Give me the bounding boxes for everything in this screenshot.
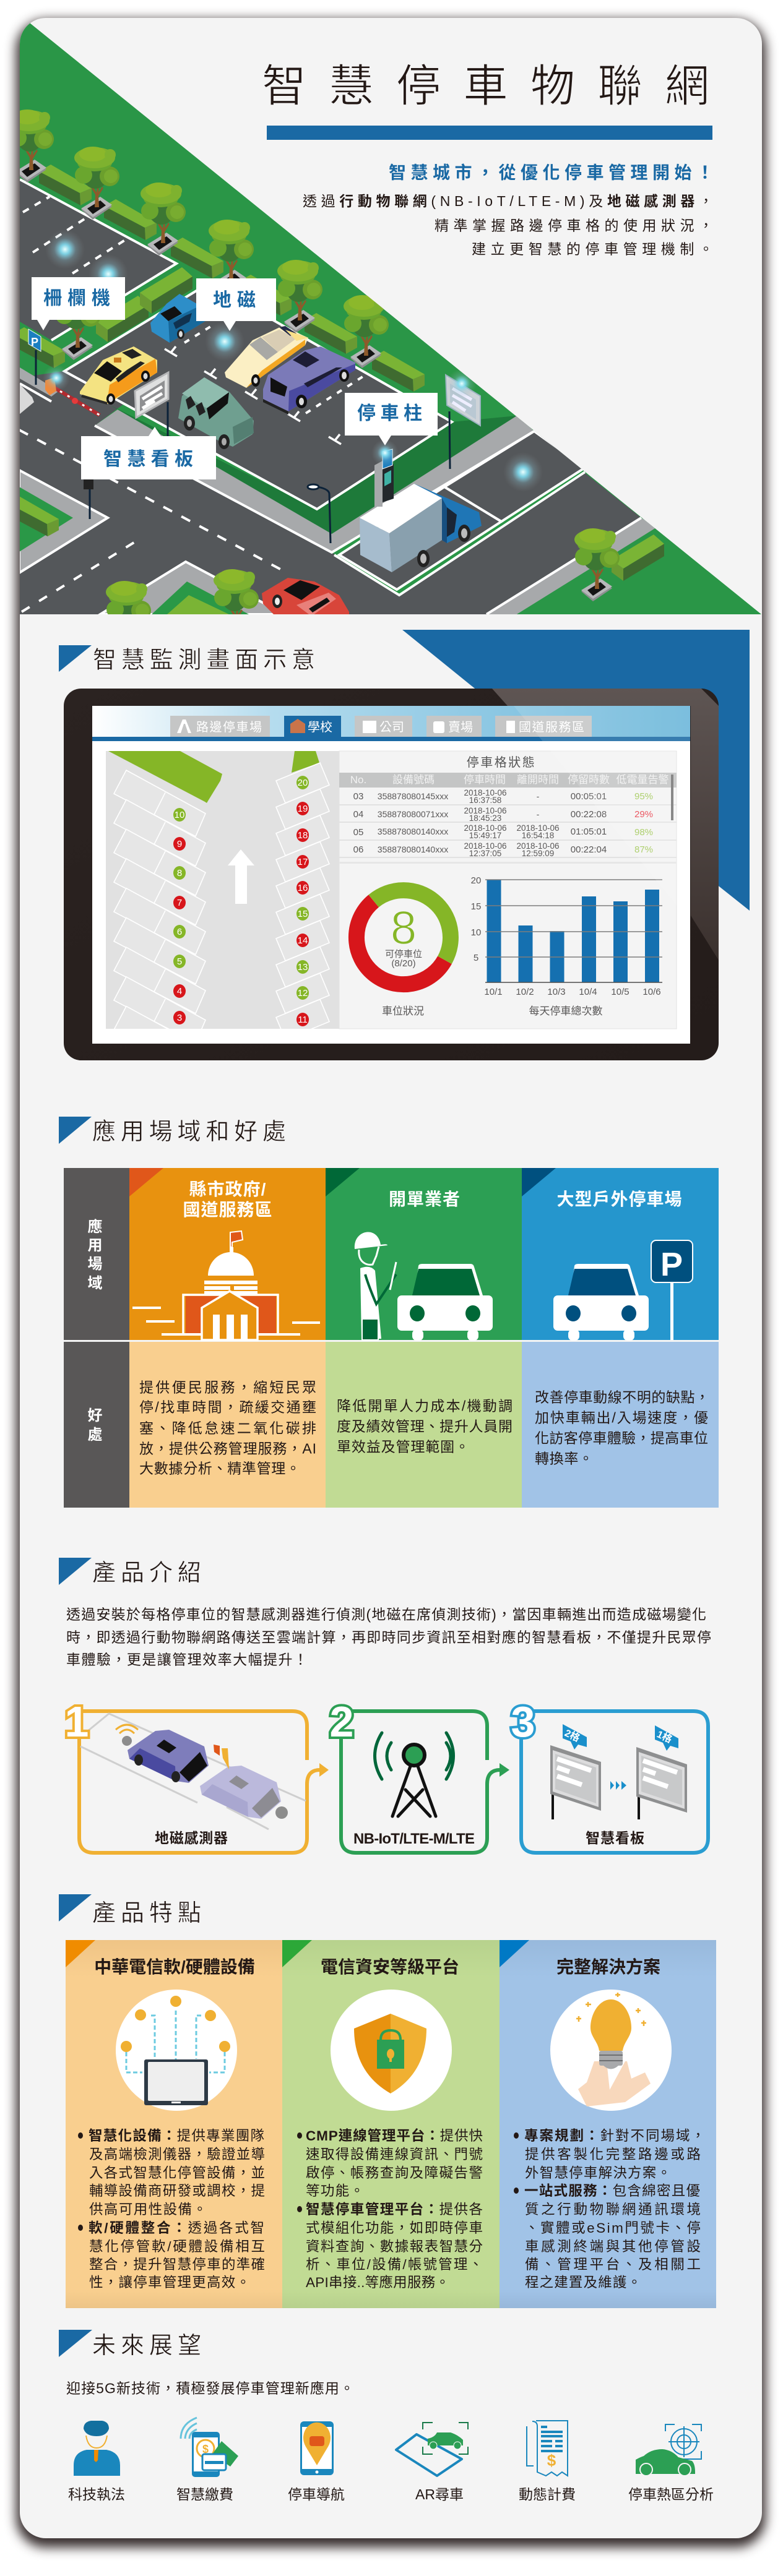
step 2: NB-IoT network (330, 1698, 509, 1853)
heading: product introduction (59, 1558, 201, 1586)
dashboard top navigation: 國道服務區 (519, 720, 584, 734)
lower centre chevron island (100, 562, 285, 614)
label: technology enforcement: 科技執法 (68, 2486, 125, 2502)
parking status table: 2018-10-06 (464, 806, 507, 815)
panel: complete solutions: 備、管理平台、及相關工 (525, 2257, 701, 2272)
panel: telecom-grade security platform: 資料查詢、數據報表智慧分 (306, 2239, 483, 2254)
panel: telecom-grade security platform: 速取得設備連線資訊、門號 (306, 2147, 483, 2162)
parking status table: 87% (634, 844, 653, 855)
parking status table: 2018-10-06 (516, 841, 560, 851)
panel: complete solutions: 質之行動物聯網通訊環境 (525, 2202, 701, 2217)
panel: telecom-grade security platform: 電信資安等級平台 (321, 1957, 459, 1977)
benefit: government: 塞、降低怠速二氧化碳排 (139, 1420, 316, 1436)
panel: Chunghwa hardware and software: 軟/硬體整合：透過各式智 (89, 2220, 264, 2236)
product introduction text (66, 1606, 711, 1668)
callout: geomagnetic sensor: 地磁 (213, 290, 256, 311)
right parking lots (334, 431, 585, 595)
panel: complete solutions: 、實體或eSim門號卡、停 (525, 2220, 701, 2236)
parking status table: 停車格狀態 (467, 755, 536, 770)
heading: product introduction: 產品介紹 (92, 1560, 201, 1586)
parking map panel: 9 (177, 839, 182, 849)
blue backdrop behind tablet (402, 630, 750, 911)
parking sign (28, 329, 41, 385)
step number 1: 1 (65, 1698, 89, 1746)
parking map panel: 5 (177, 956, 182, 967)
icon: heat map analysis (636, 2424, 701, 2476)
heading: future outlook: 未來展望 (92, 2333, 201, 2359)
pavement (20, 367, 534, 552)
icon: security shield (354, 2014, 426, 2093)
parking status table: 05 (353, 827, 363, 838)
parking map panel: 20 (298, 778, 308, 788)
icon: signboard before (550, 1745, 601, 1819)
column: ticketing operators: 開單業者 (389, 1190, 461, 1209)
trees (9, 109, 620, 642)
intro text: 智慧城市，從優化停車管理開始！ (389, 163, 714, 182)
parking status table: 18:45:23 (469, 814, 501, 823)
panel: complete solutions (500, 1940, 716, 2308)
blue car (150, 294, 205, 343)
panel: Chunghwa hardware and software: 輔導設備商研發或調校，提 (89, 2183, 265, 2199)
lower right pavement (487, 518, 656, 614)
panel: complete solutions: 提供客製化完整路邊或路 (525, 2147, 701, 2162)
column: large outdoor parking lots: 大型戶外停車場 (556, 1190, 683, 1209)
matrix row label: benefits: 好 (88, 1407, 103, 1424)
small parking lot (20, 179, 176, 340)
panel: telecom-grade security platform: 啟停、帳務查詢及障礙告警 (306, 2165, 483, 2181)
parking status table (339, 755, 677, 864)
donut chart: available spaces: 車位狀況 (382, 1005, 424, 1017)
bar chart: daily parking count: 10/6 (642, 987, 661, 997)
icon: wireless sensor (116, 1725, 138, 1746)
future outlook text: 迎接5G新技術，積極發展停車管理新應用。 (66, 2381, 354, 2397)
dashboard top navigation (92, 706, 690, 741)
icon: cell tower (375, 1733, 453, 1816)
parking map panel: 14 (298, 935, 308, 946)
label: AR car finder: AR尋車 (415, 2486, 464, 2502)
parking map panel (106, 751, 339, 1029)
purple SUV (263, 346, 355, 414)
bar chart: daily parking count (471, 875, 662, 1017)
icon: parking sign: P (660, 1246, 683, 1283)
panel: Chunghwa hardware and software: 及高端檢測儀器，驗證並導 (89, 2147, 265, 2162)
benefit: operators (326, 1342, 522, 1508)
donut chart: available spaces (357, 890, 451, 1017)
step number 2: 2 (330, 1698, 353, 1746)
panel: complete solutions: 完整解決方案 (556, 1957, 660, 1977)
dark green verge (110, 405, 517, 534)
matrix row label: application fields: 場 (88, 1256, 103, 1273)
label: dynamic billing: 動態計費 (519, 2486, 576, 2502)
parking status table: 358878080145xxx (378, 791, 448, 801)
green jeep (178, 377, 254, 449)
parking status table: 95% (634, 791, 653, 802)
column: government and service areas (129, 1168, 326, 1340)
product introduction text: 時，即透過行動物聯網路傳送至雲端計算，再即時同步資訊至相對應的智慧看板，不僅提升民眾停 (66, 1629, 711, 1646)
parking map panel: 13 (298, 962, 308, 972)
icon: chevrons (610, 1781, 626, 1790)
label: smart payment: 智慧繳費 (176, 2486, 233, 2502)
tag: 2 spaces: 2格 (563, 1727, 582, 1744)
parking map panel: 7 (177, 898, 182, 908)
parking map panel: 17 (298, 857, 308, 867)
matrix row label: application fields: 用 (88, 1237, 103, 1254)
dashboard top navigation: 路邊停車場 (196, 720, 262, 734)
dashboard top navigation: 公司 (379, 721, 404, 734)
icon: AR car finder (396, 2423, 468, 2476)
column: ticketing operators (326, 1168, 522, 1341)
benefit: government: 大數據分析、精準管理。 (139, 1460, 300, 1476)
title bar (267, 126, 712, 140)
panel: Chunghwa hardware and software: 智慧化設備：提供專業團隊 (89, 2128, 264, 2144)
step 2 label: NB-IoT/LTE-M/LTE (353, 1831, 475, 1847)
callout: barrier gate (32, 277, 125, 330)
benefit: government (129, 1342, 326, 1508)
benefit: operators: 降低開單人力成本/機動調 (337, 1398, 513, 1414)
parking kiosk (374, 442, 396, 507)
convertible (225, 326, 308, 388)
parking status table: 00:22:04 (571, 844, 607, 855)
tag: 2 spaces (563, 1724, 587, 1750)
parking status table: 低電量告警 (616, 774, 668, 786)
tag: 1 space (655, 1725, 678, 1751)
bar chart: daily parking count: 10/2 (516, 987, 534, 997)
panel: Chunghwa hardware and software: 入各式智慧化停管設備，並 (89, 2165, 265, 2181)
panel: Chunghwa hardware and software (66, 1940, 282, 2308)
delivery truck (360, 484, 482, 572)
parking status table: 00:05:01 (571, 791, 607, 802)
hero illustration: isometric smart parking lot (6, 15, 761, 642)
taxi (80, 346, 157, 405)
parking map panel: 16 (298, 883, 308, 893)
benefit: outdoor lots (522, 1342, 719, 1508)
icon: purple car (128, 1730, 209, 1783)
icon: police officer (74, 2421, 120, 2476)
icon: smart payment (181, 2418, 238, 2477)
street lamp (308, 484, 331, 543)
benefit: operators: 度及績效管理、提升人員開 (337, 1418, 513, 1434)
parking status table: 01:05:01 (571, 826, 607, 837)
parking status table: 停留時數 (568, 774, 610, 786)
parking map panel: 8 (177, 868, 182, 878)
tag: 1 space: 1格 (655, 1728, 674, 1745)
product introduction text: 透過安裝於每格停車位的智慧感測器進行偵測(地磁在席偵測技術)，當因車輛進出而造成磁場變化 (66, 1606, 706, 1622)
callout: barrier gate: 柵欄機 (43, 288, 110, 309)
product introduction text: 車體驗，更是讓管理效率大幅提升！ (66, 1652, 308, 1668)
parking status table: 29% (634, 809, 653, 820)
panel: complete solutions: 外智慧停車解決方案。 (525, 2165, 671, 2181)
parking map panel: 18 (298, 830, 308, 841)
road markings (19, 430, 287, 612)
callout: parking post (345, 393, 438, 445)
step 1: geomagnetic sensor (65, 1698, 329, 1853)
step 3 label: 智慧看板 (586, 1830, 644, 1846)
parking status table: 15:49:17 (469, 831, 501, 840)
icon: government building (132, 1231, 320, 1340)
parking map panel: 12 (298, 988, 308, 998)
panel: Chunghwa hardware and software: 供高可用性設備。 (89, 2202, 207, 2217)
label: parking heat map analysis: 停車熱區分析 (628, 2486, 714, 2502)
main road surface (20, 371, 641, 614)
icon: parking navigation (300, 2421, 334, 2475)
barrier gate (43, 364, 100, 415)
heading: monitoring screen: 智慧監測畫面示意 (93, 647, 315, 673)
parking status table: 358878080071xxx (378, 809, 448, 819)
panel: telecom-grade security platform: 等功能。 (306, 2183, 364, 2199)
icon: green car (397, 1264, 493, 1341)
matrix row label: application fields (64, 1168, 129, 1340)
parking status table: 2018-10-06 (516, 823, 560, 833)
magnetic sensor glows (45, 230, 543, 492)
column: government and service areas: 縣市政府/ (189, 1180, 266, 1199)
parking status table: 04 (353, 809, 363, 820)
parking status table: No. (350, 774, 366, 786)
parking status table: 2018-10-06 (464, 841, 507, 851)
callout: smart signboard: 智慧看板 (103, 449, 193, 470)
panel: telecom-grade security platform (282, 1940, 500, 2308)
dashboard top navigation: 賣場 (448, 720, 473, 734)
panel: complete solutions: 程之建置及維護。 (525, 2275, 641, 2290)
bar chart: daily parking count: 每天停車總次數 (529, 1005, 603, 1017)
icon: connected tablet (121, 1996, 230, 2105)
bar chart: daily parking count: 20 (471, 875, 481, 886)
panel: complete solutions: 車感測終端與其他停管設 (525, 2239, 701, 2254)
dashboard top navigation: 學校 (308, 720, 332, 734)
left white car (19, 384, 34, 414)
parking status table: 停車時間 (464, 774, 506, 786)
smart board left (135, 372, 168, 437)
road lines (80, 1714, 306, 1829)
intro text (303, 163, 714, 257)
callout: smart signboard (81, 427, 216, 479)
heading: product features (59, 1894, 201, 1926)
bar chart: daily parking count: 5 (474, 953, 478, 963)
main parking lot (64, 283, 452, 509)
hedges (12, 165, 664, 581)
parking map panel: 19 (298, 804, 308, 814)
parking sign: P (31, 336, 38, 348)
screen glare (514, 706, 690, 922)
parking status table: 358878080140xxx (378, 826, 448, 836)
panel: complete solutions: 專案規劃：針對不同場域， (524, 2128, 705, 2144)
intro text: 建立更智慧的停車管理機制。 (472, 241, 713, 257)
parking map panel: 3 (177, 1013, 182, 1023)
icon: faded car (200, 1766, 288, 1819)
title: 智慧停車物聯網 (262, 62, 709, 111)
donut chart: available spaces: (8/20) (391, 958, 416, 969)
step 1 label: 地磁感測器 (155, 1830, 228, 1846)
donut chart: available spaces: 8 (391, 902, 417, 955)
corner pavement and hedge (6, 470, 108, 573)
matrix row label: benefits (64, 1342, 129, 1508)
benefit: government: 放，提供公務管理服務，AI (139, 1440, 316, 1456)
parking status table: 12:37:05 (469, 849, 501, 858)
bar chart: daily parking count: 15 (471, 901, 481, 912)
right data panel background (339, 751, 677, 1029)
callout: geomagnetic sensor (196, 278, 276, 331)
parking map panel: 11 (298, 1015, 308, 1025)
icon: ticketing officer (355, 1232, 396, 1340)
benefit: outdoor lots: 化訪客停車體驗，提高車位 (535, 1430, 708, 1446)
panel: Chunghwa hardware and software: 整合，提升智慧停車的準確 (89, 2257, 265, 2272)
smart board right (446, 369, 480, 469)
parking status table: 358878080140xxx (378, 844, 448, 854)
donut chart: available spaces: 可停車位 (385, 949, 422, 960)
parking status table: - (537, 810, 539, 819)
parking status table: 離開時間 (517, 774, 559, 786)
panel: telecom-grade security platform: 析、車位/設備/帳號管理、 (306, 2257, 483, 2272)
panel: Chunghwa hardware and software: 性，讓停車管理更高效。 (89, 2275, 250, 2290)
bar chart: daily parking count: 10/5 (611, 987, 629, 997)
parking status table: 06 (353, 844, 363, 855)
panel: telecom-grade security platform: CMP連線管理平台：提供快 (306, 2127, 483, 2144)
parking map panel: 4 (177, 986, 182, 997)
tablet frame (64, 689, 719, 1060)
bar chart: daily parking count: 10 (471, 927, 481, 938)
traffic light (84, 479, 93, 519)
icon: light bulb in hand (576, 1993, 651, 2106)
matrix row label: application fields: 應 (88, 1218, 103, 1235)
tablet screen (92, 706, 690, 1044)
parking status table: 2018-10-06 (464, 788, 507, 797)
column: large outdoor parking lots (522, 1168, 719, 1341)
heading: future outlook (59, 2330, 201, 2359)
icon: dynamic billing (527, 2421, 568, 2476)
icon: dynamic billing: $ (547, 2451, 556, 2470)
parking status table: 98% (634, 827, 653, 838)
bar chart: daily parking count: 10/1 (484, 987, 503, 997)
parking status table: 2018-10-06 (464, 823, 507, 833)
benefit: government: 提供便民服務，縮短民眾 (139, 1380, 316, 1396)
label: parking navigation: 停車導航 (288, 2486, 345, 2502)
parking status table: 12:59:09 (522, 849, 554, 858)
matrix row label: benefits: 處 (88, 1427, 103, 1443)
parking status table: 03 (353, 791, 363, 802)
icon: parking sign (651, 1240, 693, 1340)
intro text: 透過 行動物聯網 (NB-IoT/LTE-M)及 地磁感測器 ， (303, 193, 713, 209)
icon: signboard after (636, 1747, 687, 1819)
column: government and service areas: 國道服務區 (183, 1200, 273, 1219)
parking status table: 設備號碼 (392, 774, 435, 786)
parking map panel: 10 (175, 810, 184, 820)
icon: blue car (553, 1264, 649, 1341)
parking map panel: 6 (177, 927, 182, 937)
icon: smart payment: $ (202, 2443, 209, 2455)
panel: Chunghwa hardware and software: 中華電信軟/硬體設備 (94, 1957, 255, 1977)
benefit: government: 停/找車時間，疏緩交通壅 (139, 1399, 316, 1415)
matrix row label: application fields: 域 (88, 1275, 103, 1292)
panel: telecom-grade security platform: 智慧停車管理平台：提供各 (306, 2201, 483, 2217)
step 3: smart signboard (511, 1698, 708, 1853)
benefit: operators: 單效益及管理範圍。 (337, 1439, 469, 1455)
bar chart: daily parking count: 10/4 (579, 987, 597, 997)
intro text: 精準掌握路邊停車格的使用狀況， (435, 218, 713, 234)
parking status table: 00:22:08 (571, 809, 607, 820)
panel: complete solutions: 一站式服務：包含綿密且優 (524, 2183, 700, 2199)
panel: telecom-grade security platform: 式模組化功能，如即時停車 (306, 2220, 483, 2236)
step number 3: 3 (511, 1698, 535, 1746)
red sports car (262, 578, 349, 614)
icon: alert marks (214, 1745, 229, 1769)
benefit: outdoor lots: 加快車輛出/入場速度，優 (535, 1409, 708, 1425)
benefit: outdoor lots: 改善停車動線不明的缺點， (535, 1389, 709, 1406)
callout: parking post: 停車柱 (357, 403, 422, 424)
parking status table: 16:37:58 (469, 796, 501, 805)
heading: product features: 產品特點 (92, 1900, 201, 1926)
parking map panel: 15 (298, 909, 308, 919)
bar chart: daily parking count: 10/3 (547, 987, 566, 997)
benefit: outdoor lots: 轉換率。 (535, 1450, 593, 1466)
heading: application fields and benefits: 應用場域和好處 (92, 1119, 286, 1145)
panel: Chunghwa hardware and software: 慧化停管軟/硬體設備相互 (89, 2239, 265, 2254)
panel: telecom-grade security platform: API串接..等應用服務。 (306, 2275, 449, 2290)
parking status table: - (537, 792, 539, 801)
parking status table: 16:54:18 (522, 831, 554, 840)
